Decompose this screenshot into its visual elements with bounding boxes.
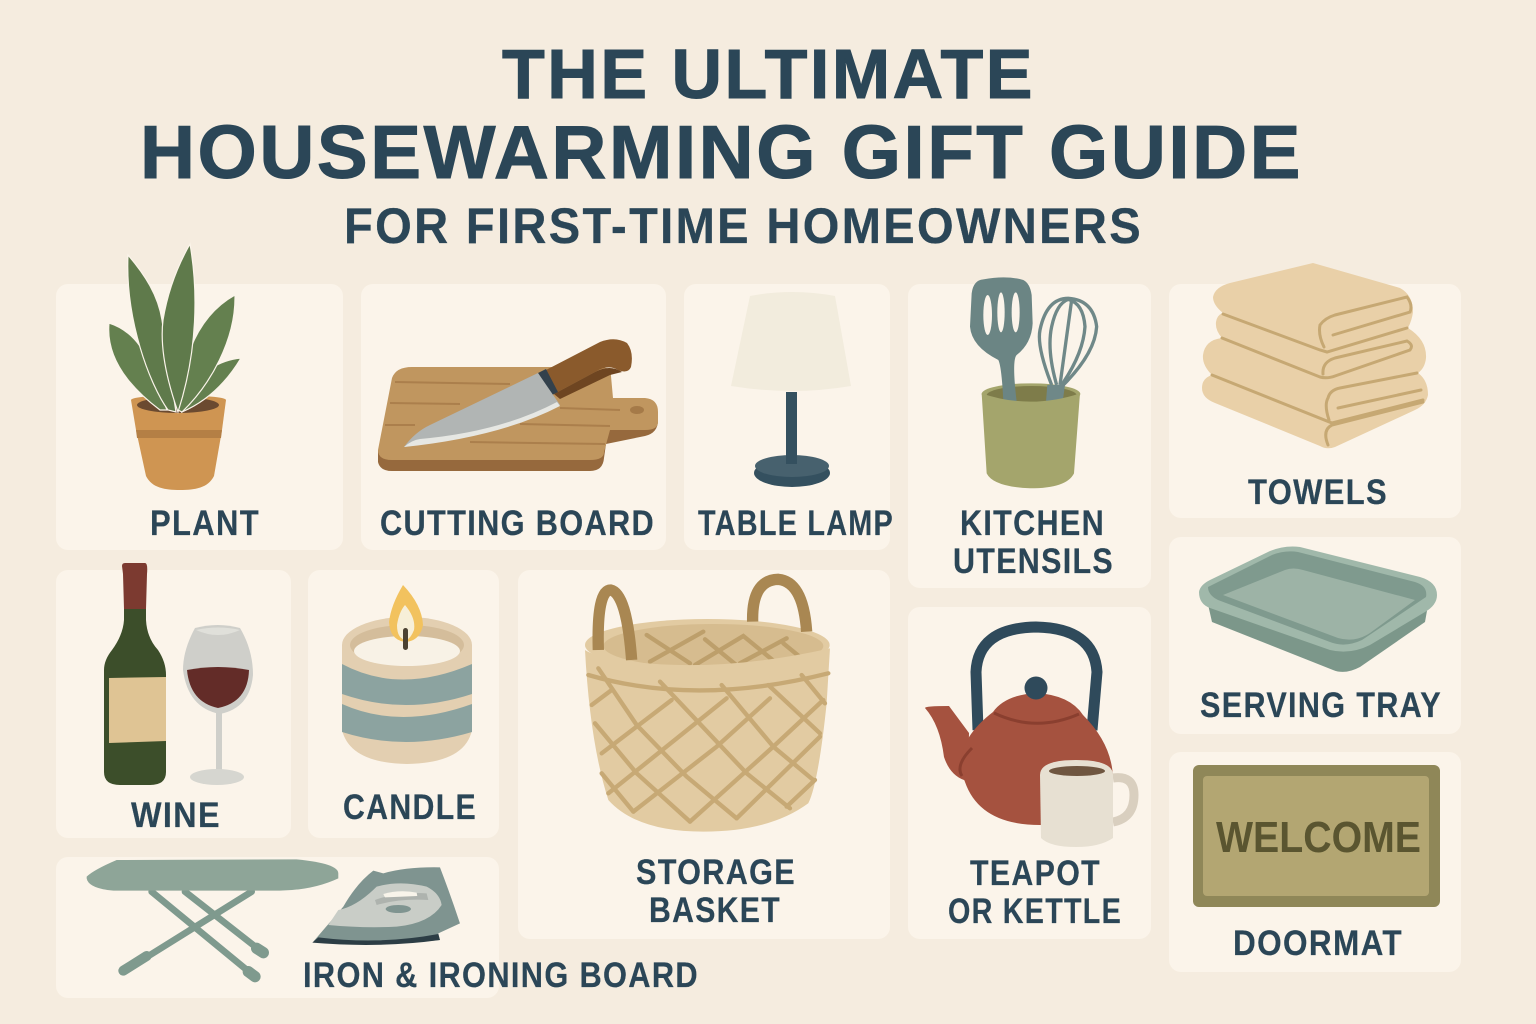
label: storage basket [636, 853, 796, 930]
icon: kitchen utensils in cup [970, 277, 1097, 488]
panel: teapot [908, 607, 1151, 939]
icon: welcome doormat: WELCOME [1216, 813, 1421, 862]
label: serving tray: SERVING TRAY [1200, 686, 1442, 725]
label: cutting board: CUTTING BOARD [380, 504, 655, 543]
label: towels: TOWELS [1248, 473, 1388, 512]
icon: striped candle [342, 585, 472, 764]
label: candle: CANDLE [343, 788, 477, 827]
label: kitchen utensils: UTENSILS [953, 542, 1114, 581]
icon: steam iron [312, 867, 460, 945]
icon: teapot and mug [925, 627, 1134, 847]
title: FOR FIRST-TIME HOMEOWNERS [344, 198, 1143, 254]
label: kitchen utensils: KITCHEN [960, 504, 1105, 543]
icon: serving tray [1199, 546, 1437, 672]
panel: kitchen utensils [908, 277, 1151, 588]
title: THE ULTIMATE [502, 35, 1035, 113]
icon: woven storage basket [585, 579, 830, 832]
title: HOUSEWARMING GIFT GUIDE [140, 110, 1303, 194]
label: table lamp: TABLE LAMP [698, 504, 894, 543]
label: kitchen utensils [953, 504, 1114, 581]
icon: welcome doormat [1193, 765, 1440, 907]
icon: cutting board and knife [378, 339, 658, 471]
icon: wine bottle and glass [104, 563, 253, 785]
panel: plant [56, 244, 343, 550]
icon: table lamp [731, 292, 851, 487]
label: doormat: DOORMAT [1233, 924, 1403, 963]
panel: candle [308, 570, 499, 838]
label: plant: PLANT [150, 504, 260, 543]
icon: stacked towels [1202, 263, 1428, 448]
icon: ironing board [87, 859, 338, 977]
panel: iron and ironing board [56, 857, 699, 998]
label: wine: WINE [131, 796, 221, 835]
panel: storage basket [518, 570, 890, 939]
label: storage basket: BASKET [649, 891, 781, 930]
panel: towels [1169, 263, 1461, 518]
panel: serving tray [1169, 537, 1461, 734]
label: teapot or kettle: OR KETTLE [948, 892, 1122, 931]
panel: doormat [1169, 752, 1461, 972]
icon: potted plant [109, 244, 241, 490]
panel: wine [56, 563, 291, 838]
panel: cutting board [361, 284, 666, 550]
label: teapot or kettle [948, 854, 1122, 931]
label: teapot or kettle: TEAPOT [970, 854, 1101, 893]
label: iron and ironing board: IRON & IRONING BOARD [303, 956, 699, 995]
panel: table lamp [684, 284, 894, 550]
label: storage basket: STORAGE [636, 853, 796, 892]
title [140, 35, 1303, 254]
